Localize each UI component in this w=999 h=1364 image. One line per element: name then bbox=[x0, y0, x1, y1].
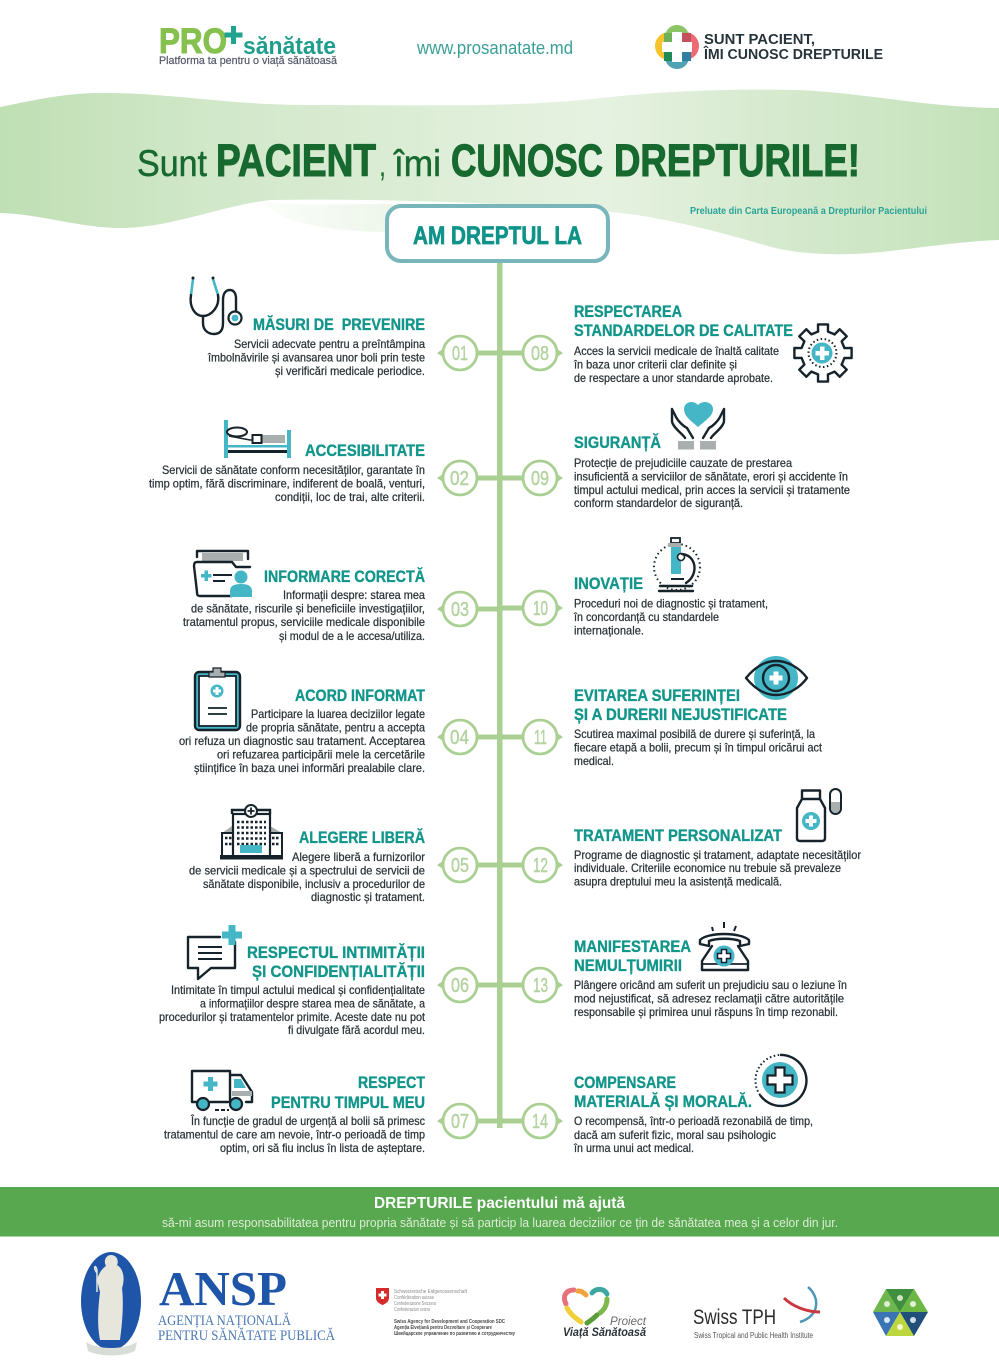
heading: TRATAMENT PERSONALIZAT bbox=[574, 827, 782, 845]
logo: ANSP: PENTRU SĂNĂTATE PUBLICĂ bbox=[158, 1327, 335, 1344]
number badge 13 bbox=[502, 968, 563, 1002]
timeline spine bbox=[497, 260, 502, 1128]
logo: Swiss Confederation: Agenția Elvețiană pentru Dezvoltare și Cooperare bbox=[394, 1325, 492, 1331]
number badge 02 bbox=[437, 461, 497, 495]
heading bbox=[574, 1074, 752, 1111]
title: Sunt bbox=[137, 143, 208, 184]
icon: microscope bbox=[654, 538, 700, 591]
icon: stethoscope bbox=[191, 276, 242, 334]
text block: Plângere oricând am suferit un prejudiciu sau o leziune în bbox=[574, 978, 847, 992]
text block: optim, ori să fiu inclus în lista de așteptare. bbox=[220, 1141, 425, 1155]
text block bbox=[189, 850, 425, 904]
heading: STANDARDELOR DE CALITATE bbox=[574, 322, 793, 340]
title: CUNOSC bbox=[451, 135, 603, 186]
number badge 09 bbox=[502, 461, 563, 495]
text block: insuficientă a serviciilor de sănătate, erori și accidente în bbox=[574, 470, 848, 484]
text block bbox=[183, 588, 425, 643]
text block: asupra dreptului meu la asistență medicală. bbox=[574, 874, 782, 888]
text block: conform standardelor de siguranță. bbox=[574, 496, 743, 510]
text block: Servicii adecvate pentru a preîntâmpina bbox=[234, 337, 425, 351]
logo: PRO sănătate: sănătate bbox=[243, 33, 336, 60]
text block bbox=[207, 337, 425, 378]
text block: fiecare etapă a bolii, precum și în timpul oricărui act bbox=[574, 740, 823, 754]
title: , bbox=[379, 146, 386, 184]
heading: MATERIALĂ ȘI MORALĂ. bbox=[574, 1092, 752, 1111]
title bbox=[137, 135, 860, 186]
icon: medicine bottle and pill bbox=[797, 789, 841, 841]
panel: right 13, complaint bbox=[502, 922, 847, 1019]
panel: right 9, safety bbox=[502, 402, 850, 510]
text block: individuale. Criteriile economice nu trebuie să prevaleze bbox=[574, 861, 841, 875]
icon: medical folder bbox=[194, 551, 252, 597]
text block bbox=[574, 456, 850, 510]
text block: Scutirea maximal posibilă de durere și suferință, la bbox=[574, 727, 815, 741]
panel: right 8, quality standards bbox=[502, 303, 852, 385]
heading: NEMULȚUMIRII bbox=[574, 957, 682, 975]
title: îmi bbox=[393, 143, 441, 184]
text block: diagnostic și tratament. bbox=[311, 890, 425, 904]
text block: Proceduri noi de diagnostic și tratament, bbox=[574, 596, 768, 610]
text block: ori refuza un diagnostic sau tratament. Acceptarea bbox=[179, 734, 425, 748]
icon: telephone bbox=[700, 922, 749, 970]
panel: right 12, personalized treatment bbox=[502, 789, 861, 888]
text block: de sănătate, riscurile și beneficiile investigațiilor, bbox=[191, 602, 425, 616]
text block bbox=[574, 848, 861, 888]
logo: Swiss TPH: Swiss TPH bbox=[693, 1306, 776, 1329]
number badge 05 bbox=[437, 848, 497, 882]
heading bbox=[247, 943, 425, 981]
heading: MĂSURI DE PREVENIRE bbox=[253, 315, 425, 334]
number badge 12 bbox=[502, 848, 563, 882]
text block: Alegere liberă a furnizorilor bbox=[292, 850, 425, 864]
heading: INFORMARE CORECTĂ bbox=[264, 567, 425, 586]
panel: right 10, innovation bbox=[502, 538, 768, 638]
number badge 08 bbox=[502, 336, 563, 370]
heading box: AM DREPTUL LA: AM DREPTUL LA bbox=[413, 222, 582, 250]
logo: ANSP: ANSP bbox=[159, 1261, 287, 1316]
title: PACIENT bbox=[216, 135, 376, 186]
number badge 06: 06 bbox=[451, 975, 469, 997]
heading: COMPENSARE bbox=[574, 1074, 676, 1092]
number badge 12: 12 bbox=[533, 855, 548, 877]
number badge 09: 09 bbox=[531, 468, 549, 490]
text block bbox=[179, 707, 425, 775]
logo: PRO sănătate bbox=[159, 22, 338, 67]
text block: medical. bbox=[574, 754, 614, 768]
number badge 14 bbox=[502, 1104, 563, 1138]
heading bbox=[271, 1074, 425, 1112]
logo: ANSP bbox=[81, 1252, 335, 1356]
logo: Swiss Confederation: Швейцарское управление по развитию и сотрудничеству bbox=[394, 1330, 515, 1337]
text block bbox=[573, 1114, 813, 1155]
icon: eye with plus bbox=[746, 656, 807, 700]
text block: Participare la luarea deciziilor legate bbox=[251, 707, 425, 721]
text block: responsabile și primirea unui răspuns în timp rezonabil. bbox=[574, 1005, 838, 1019]
icon: circled plus bbox=[755, 1055, 806, 1106]
number badge 06 bbox=[437, 968, 497, 1002]
text block bbox=[149, 463, 425, 504]
icon: clipboard bbox=[195, 668, 240, 730]
number badge 11 bbox=[502, 720, 563, 754]
heading: ȘI A DURERII NEJUSTIFICATE bbox=[574, 706, 787, 724]
logo: Swiss TPH bbox=[693, 1287, 820, 1340]
icon: hospital bed bbox=[224, 420, 291, 458]
text block: a informațiilor despre starea mea de sănătate, a bbox=[200, 996, 425, 1010]
text block: ori refuzarea participării mele la cercetările bbox=[217, 748, 425, 762]
text block: Protecție de prejudiciile cauzate de prestarea bbox=[574, 456, 792, 470]
panel: right 5, free choice bbox=[189, 805, 497, 904]
logo: PRO sănătate: Platforma ta pentru o viață sănătoasă bbox=[159, 55, 338, 67]
text block: Servicii de sănătate conform necesităților, garantate în bbox=[162, 463, 425, 477]
logo: hexagon bbox=[873, 1289, 928, 1336]
footer band: să-mi asum responsabilitatea pentru propria sănătate și să particip la luarea deciziilor ce țin de sănătatea mea și a celor din jur. bbox=[162, 1216, 838, 1230]
logo: Swiss Confederation: Confédération suisse bbox=[394, 1295, 434, 1301]
heading: RESPECT bbox=[358, 1074, 425, 1092]
number badge 01: 01 bbox=[452, 343, 468, 365]
number badge 10: 10 bbox=[533, 598, 548, 620]
logo: Swiss Confederation: Confederaziun svizra bbox=[394, 1307, 430, 1313]
heading: ACORD INFORMAT bbox=[295, 687, 425, 705]
logo: campaign mark bbox=[655, 25, 883, 69]
heading bbox=[574, 687, 787, 724]
text block bbox=[159, 983, 426, 1037]
heading: ACCESIBILITATE bbox=[305, 442, 425, 460]
text block: mod nejustificat, să adresez reclamații către autoritățile bbox=[574, 992, 844, 1006]
text block: dacă am suferit fizic, moral sau psihologic bbox=[574, 1128, 776, 1142]
icon: hands holding heart bbox=[672, 402, 724, 450]
logo: ANSP: AGENȚIA NAȚIONALĂ bbox=[158, 1312, 291, 1329]
logo: Swiss Confederation: Confederazione Svizzera bbox=[394, 1301, 436, 1307]
panel: right 6, privacy and confidentiality bbox=[159, 925, 497, 1037]
logo: Swiss TPH: Swiss Tropical and Public Health Institute bbox=[694, 1331, 813, 1340]
text block: sănătate disponibile, inclusiv a procedurilor de bbox=[203, 877, 425, 891]
heading: ȘI CONFIDENȚIALITĂȚII bbox=[252, 962, 425, 981]
number badge 14: 14 bbox=[532, 1111, 548, 1133]
text block bbox=[164, 1114, 425, 1155]
logo: campaign mark: ÎMI CUNOSC DREPTURILE bbox=[703, 45, 883, 63]
logo: Proiect Viață Sănătoasă bbox=[563, 1289, 647, 1339]
text block: îmbolnăvirile și avansarea unor boli prin teste bbox=[207, 350, 425, 364]
text block bbox=[574, 727, 823, 768]
panel: right 14, compensation bbox=[502, 1055, 813, 1155]
text block: Intimitate în timpul actului medical și confidențialitate bbox=[171, 983, 425, 997]
number badge 11: 11 bbox=[534, 727, 547, 749]
number badge 04 bbox=[437, 720, 497, 754]
text block: Informații despre: starea mea bbox=[283, 588, 425, 602]
text block: timpul actului medical, prin acces la servicii și tratamente bbox=[574, 483, 850, 497]
logo: campaign mark: SUNT PACIENT, bbox=[704, 32, 815, 48]
number badge 07 bbox=[437, 1104, 497, 1138]
source note: Preluate din Carta Europeană a Drepturilor Pacientului bbox=[690, 205, 927, 217]
text block bbox=[574, 978, 847, 1019]
text block: condiții, loc de trai, alte criterii. bbox=[275, 490, 425, 504]
text block: procedurilor și tratamentelor primite. Aceste date nu pot bbox=[159, 1010, 426, 1024]
text block: În funcție de gradul de urgență al bolii să primesc bbox=[190, 1114, 425, 1128]
number badge 02: 02 bbox=[450, 468, 469, 490]
logo: Proiect Viață Sănătoasă: Viață Sănătoasă bbox=[563, 1327, 647, 1339]
text block bbox=[573, 596, 768, 638]
text block: în concordanță cu standardele bbox=[573, 610, 719, 624]
panel: right 4, informed consent bbox=[179, 668, 497, 775]
panel: right 2, accessibility bbox=[149, 420, 497, 504]
text block: tratamentul de care am nevoie, într-o perioadă de timp bbox=[164, 1128, 425, 1142]
heading: EVITAREA SUFERINȚEI bbox=[574, 687, 740, 705]
text block: Acces la servicii medicale de înaltă calitate bbox=[574, 344, 779, 358]
heading: SIGURANȚĂ bbox=[574, 433, 661, 452]
heading: INOVAȚIE bbox=[574, 575, 643, 593]
heading bbox=[574, 938, 691, 975]
number badge 01 bbox=[437, 336, 497, 370]
text block: de servicii medicale și a spectrului de servicii de bbox=[189, 864, 425, 878]
number badge 13: 13 bbox=[533, 975, 548, 997]
heading: PENTRU TIMPUL MEU bbox=[271, 1094, 425, 1112]
text block: științifice în baza unei informări prealabile clare. bbox=[194, 761, 425, 775]
number badge 07: 07 bbox=[451, 1111, 469, 1133]
number badge 08: 08 bbox=[531, 343, 549, 365]
text block: O recompensă, într-o perioadă rezonabilă de timp, bbox=[574, 1114, 813, 1128]
logo: Swiss Confederation bbox=[376, 1288, 515, 1337]
footer band bbox=[0, 1187, 999, 1236]
heading bbox=[574, 303, 793, 340]
text block bbox=[573, 344, 779, 385]
text block: timp optim, fără discriminare, indiferent de boală, venturi, bbox=[149, 476, 425, 490]
text block: fi divulgate fără acordul meu. bbox=[288, 1023, 425, 1037]
number badge 03: 03 bbox=[451, 599, 469, 621]
text block: internaționale. bbox=[574, 624, 644, 638]
number badge 04: 04 bbox=[450, 727, 469, 749]
text block: de respectare a unor standarde aprobate. bbox=[574, 371, 773, 385]
icon: gear with plus bbox=[794, 324, 852, 382]
icon: hospital building bbox=[220, 805, 283, 860]
text block: și modul de a le accesa/utiliza. bbox=[279, 629, 425, 643]
footer band: DREPTURILE pacientului mă ajută bbox=[374, 1195, 625, 1212]
logo: PRO sănătate: PRO bbox=[159, 22, 227, 61]
panel: right 1, prevention measures bbox=[191, 276, 497, 378]
logo: Proiect Viață Sănătoasă: Proiect bbox=[610, 1314, 647, 1328]
logo: Swiss Confederation: Schweizerische Eidgenossenschaft bbox=[394, 1289, 468, 1295]
number badge 10 bbox=[502, 591, 563, 625]
heading: RESPECTAREA bbox=[574, 303, 682, 321]
panel: right 7, respect for my time bbox=[164, 1071, 497, 1155]
text block: în urma unui act medical. bbox=[573, 1141, 694, 1155]
text block: în baza unor criterii clar definite și bbox=[573, 358, 737, 372]
icon: speech bubble with plus bbox=[188, 925, 242, 979]
heading: MANIFESTAREA bbox=[574, 938, 691, 956]
title: DREPTURILE! bbox=[614, 135, 860, 186]
number badge 05: 05 bbox=[451, 855, 469, 877]
text block: și verificări medicale periodice. bbox=[275, 364, 425, 378]
panel: right 11, avoiding unjustified suffering bbox=[502, 656, 823, 768]
panel: right 3, correct information bbox=[183, 551, 497, 643]
heading: ALEGERE LIBERĂ bbox=[299, 828, 425, 847]
number badge 03 bbox=[437, 592, 497, 626]
text block: tratamentul propus, serviciile medicale disponibile bbox=[183, 615, 425, 629]
text block: de propria sănătate, pentru a accepta bbox=[246, 720, 425, 734]
header wave background bbox=[0, 90, 999, 254]
website address: www.prosanatate.md bbox=[416, 38, 573, 58]
heading: RESPECTUL INTIMITĂȚII bbox=[247, 943, 425, 962]
heading box: AM DREPTUL LA bbox=[387, 206, 608, 261]
text block: Programe de diagnostic și tratament, adaptate necesităților bbox=[574, 848, 861, 862]
icon: ambulance bbox=[192, 1071, 252, 1110]
logo: Swiss Confederation: Swiss Agency for Development and Cooperation SDC bbox=[394, 1319, 505, 1325]
